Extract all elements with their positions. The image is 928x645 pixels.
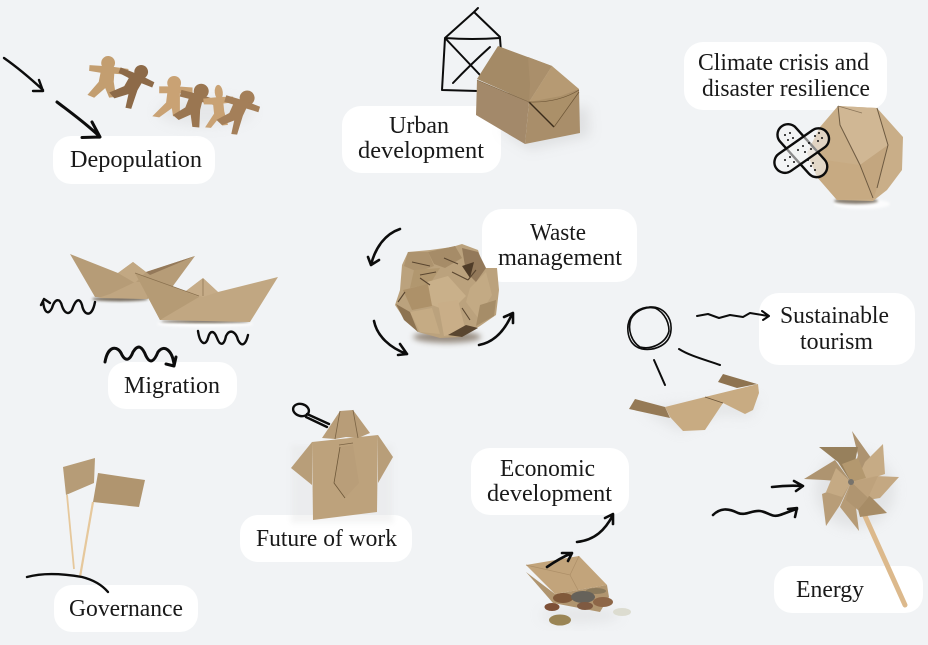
panel: waste management: [368, 209, 637, 355]
arrow: bottom right cycle: [479, 313, 513, 345]
icon: sketched bandage: [770, 120, 833, 181]
arrow: straight wind arrow: [772, 481, 803, 491]
label: Migration: Migration: [124, 372, 220, 399]
icon: paper wallet with coins: [526, 556, 631, 626]
icon: sketched sun circle: [628, 307, 671, 349]
label: Future of work: Future of work: [256, 525, 398, 552]
icon: paper people chain: [87, 55, 264, 140]
arrow: curved arrow to label: [577, 514, 613, 542]
panel: urban development: [342, 8, 590, 173]
panel: energy: [713, 431, 923, 613]
icon: paper flags: [63, 458, 145, 577]
panel: sustainable tourism: [628, 293, 915, 432]
arrow: wavy wind arrow: [713, 508, 797, 517]
label: Waste management: management: [498, 244, 622, 271]
label: Urban development: Urban: [389, 112, 449, 139]
label: Energy: Energy: [796, 576, 865, 603]
arrow: upper sketch arrow: [4, 58, 43, 91]
panel: governance: [27, 458, 198, 632]
label: Governance: Governance: [69, 595, 183, 622]
label: Climate crisis and disaster resilience: [684, 42, 887, 110]
icon: sketched wave right: [198, 331, 248, 344]
panel: migration: [41, 254, 278, 409]
arrow: lower sketch arrow: [57, 102, 100, 138]
label: Waste management: Waste: [530, 219, 586, 246]
icon: origami house: [476, 46, 590, 150]
panel: economic development: [471, 448, 631, 626]
label: Climate crisis and disaster resilience: Climate crisis and: [698, 49, 869, 76]
label: Energy: [774, 566, 923, 613]
icon: sketched house: [442, 8, 501, 91]
icon: paper globe: [807, 106, 903, 209]
arrow: curved sketch line: [27, 574, 108, 592]
arrow: sketched wave arrow to migration label: [105, 347, 176, 366]
label: Migration: [108, 362, 237, 409]
icon: sketched wave arrow left: [41, 299, 95, 314]
label: Economic development: development: [487, 480, 612, 507]
panel: future of work: [240, 402, 412, 562]
label: Depopulation: Depopulation: [70, 146, 202, 173]
icon: paper pinwheel: [804, 431, 905, 605]
icon: front paper boat: [135, 273, 278, 327]
icon: back paper boat: [70, 254, 195, 302]
panel: depopulation: [4, 55, 264, 184]
arrow: zigzag arrow to label: [697, 311, 769, 320]
label: Urban development: development: [358, 137, 484, 164]
icon: paper sunglasses: [629, 374, 760, 432]
panel: climate crisis: [684, 42, 903, 209]
label: Economic development: [471, 448, 629, 515]
label: Economic development: Economic: [500, 455, 595, 482]
icon: crumpled paper ball: [395, 244, 499, 343]
icon: sketched key: [292, 402, 329, 427]
icon: origami shirt: [291, 410, 393, 523]
arrow: bottom left cycle: [374, 321, 407, 355]
label: Depopulation: [53, 136, 215, 184]
icon: sun rays: [654, 349, 720, 385]
label: Sustainable tourism: Sustainable: [780, 302, 889, 329]
label: Future of work: [240, 515, 412, 562]
label: Urban development: [342, 106, 501, 173]
label: Governance: [54, 585, 198, 632]
label: Waste management: [482, 209, 637, 282]
arrow: top left cycle: [368, 229, 400, 265]
label: Sustainable tourism: tourism: [800, 328, 873, 355]
arrow: short arrow on wallet: [547, 553, 572, 567]
label: Climate crisis and disaster resilience: disaster resilience: [702, 75, 870, 102]
label: Sustainable tourism: [759, 293, 915, 365]
